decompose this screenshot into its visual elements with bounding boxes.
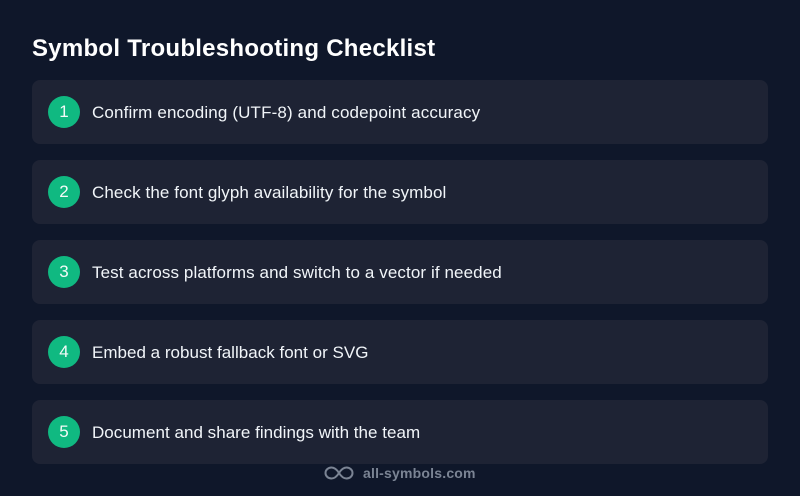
- step 2 text: Check the font glyph availability for the symbol: [92, 183, 446, 202]
- step 1 text: Confirm encoding (UTF-8) and codepoint accuracy: [92, 103, 480, 122]
- step 2 number badge: [48, 176, 80, 208]
- icon: infinity: [324, 466, 354, 480]
- step 5 number badge: [48, 416, 80, 448]
- step 3 number badge: [48, 256, 80, 288]
- step 1 number badge: [48, 96, 80, 128]
- panel: step 2: [32, 160, 768, 224]
- step 5 text: Document and share findings with the team: [92, 423, 420, 442]
- step 4 text: Embed a robust fallback font or SVG: [92, 343, 368, 362]
- step 3 number badge: 3: [59, 262, 69, 281]
- step 4 number badge: [48, 336, 80, 368]
- panel: step 3: [32, 240, 768, 304]
- title: Symbol Troubleshooting Checklist: [32, 35, 435, 62]
- step 1 number badge: 1: [59, 102, 69, 121]
- footer brand: [324, 465, 476, 481]
- panel: step 4: [32, 320, 768, 384]
- footer text: all-symbols.com: [363, 465, 476, 481]
- panel: step 1: [32, 80, 768, 144]
- step 4 number badge: 4: [59, 342, 69, 361]
- step 5 number badge: 5: [59, 422, 69, 441]
- step 3 text: Test across platforms and switch to a vector if needed: [92, 263, 502, 282]
- panel: step 5: [32, 400, 768, 464]
- step 2 number badge: 2: [59, 182, 69, 201]
